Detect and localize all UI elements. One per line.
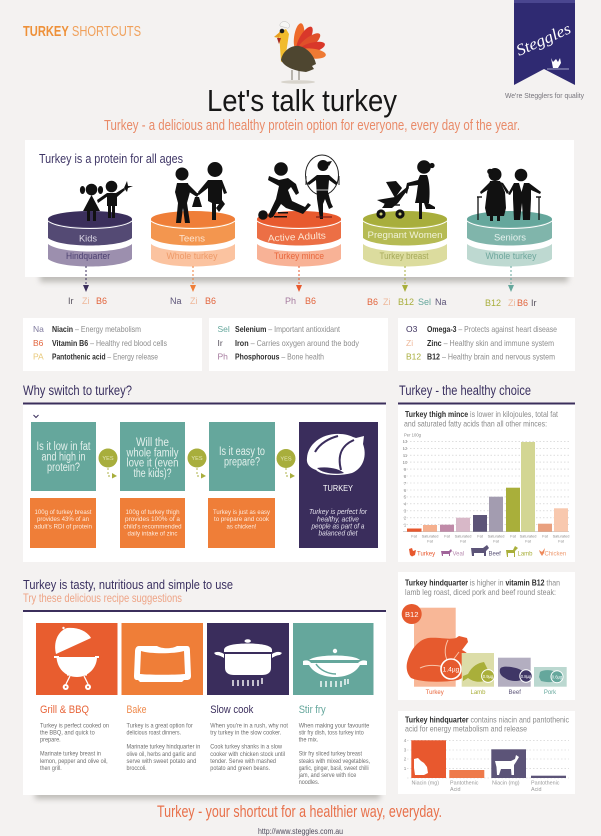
recipe text: stir fry: When making your favourite	[299, 722, 370, 729]
panel: nutrient key centre: Iron – Carries oxygen around the body	[235, 339, 360, 348]
icon: skipping woman silhouette	[306, 155, 339, 219]
B12 intro text	[405, 578, 560, 597]
recipe: stir fry	[293, 623, 374, 695]
heading: healthy choice: Turkey - the healthy choice	[399, 383, 531, 398]
bar: pork: Pork	[544, 690, 557, 696]
bar: pork: 0.6µg	[552, 674, 563, 680]
yes badge and arrow 2	[188, 448, 206, 478]
panel: nutrient key left: PA	[33, 352, 44, 362]
bar chart: fat and saturated fat: 1	[404, 522, 407, 528]
bar: lamb: Lamb	[470, 690, 486, 696]
bar chart: niacin and pantothenic acid: 2	[404, 756, 407, 762]
recipe text: slow cook	[210, 704, 288, 772]
recipe text: stir fry: jam, and serve with rice	[298, 772, 357, 779]
bar: lamb	[462, 653, 494, 696]
recipe: bake	[122, 623, 203, 695]
recipe text: slow cook: Cook turkey shanks in a slow	[210, 744, 282, 751]
closing tagline: Turkey - your shortcut for a healthier way, everyday.	[157, 803, 442, 821]
panel: niacin and pantothenic acid	[398, 711, 575, 794]
nutrient codes under age groups: B12	[485, 298, 501, 308]
niacin intro text	[405, 716, 569, 734]
question box 1: protein?	[47, 462, 80, 474]
recipe text: stir fry: Stir fry	[299, 704, 326, 716]
panel: nutrient key right: Omega-3 – Protects against heart disease	[427, 325, 557, 334]
bar chart: niacin and pantothenic acid: Niacin (mg)	[492, 780, 520, 786]
bar chart: fat and saturated fat: Saturated	[553, 534, 569, 538]
nutrient codes under age groups: Zi	[190, 296, 198, 306]
answer box 2	[120, 498, 185, 548]
label: Teens: Teens	[179, 232, 205, 244]
recipe text: slow cook: cooker with chicken stock until	[210, 751, 285, 758]
nutrient codes under age groups: Zi	[82, 296, 90, 306]
bar chart: fat and saturated fat: 6	[404, 488, 407, 493]
bar: beef: Beef	[509, 690, 521, 696]
panel: nutrient key left: Vitamin B6 – Healthy red blood cells	[52, 339, 167, 348]
bar chart: fat and saturated fat: 3	[404, 508, 407, 514]
bar chart: fat and saturated fat: Per 100g	[404, 432, 422, 438]
recipe text: slow cook: potato and green beans.	[210, 765, 270, 772]
question box 2	[120, 422, 185, 491]
chart intro text: Turkey thigh mince is lower in kilojoules, total fat	[405, 410, 559, 419]
group: pregnant women	[363, 160, 447, 292]
label: Active Adults: Active Adults	[268, 229, 326, 244]
recipe text: bake: delicious roast dinners.	[126, 730, 181, 737]
answer box 2: provides 100% of a	[125, 516, 180, 523]
label: Whole turkey: Whole turkey	[486, 251, 537, 261]
heading: why switch: Why switch to turkey?	[23, 383, 132, 398]
recipe text: grill and bbq: Grill & BBQ	[40, 704, 89, 716]
bar chart: niacin and pantothenic acid: 1	[404, 766, 407, 771]
recipe text: bake: Marinate turkey hindquarter in	[126, 744, 201, 751]
recipe text: grill and bbq: prepare.	[40, 737, 61, 744]
label: Pregnant Women: Pregnant Women	[368, 229, 442, 240]
icon: rooster	[551, 58, 561, 68]
question box 1: Is it low in fat	[36, 441, 91, 453]
turkey conclusion box: Turkey is perfect for	[309, 509, 368, 516]
logo wordmark: Steggles	[514, 21, 574, 60]
bar chart: fat and saturated fat: Saturated	[455, 534, 471, 538]
recipe text: bake: Turkey is a great option for	[126, 722, 193, 729]
answer box 2: 100g of turkey thigh	[126, 509, 180, 516]
chart legend	[409, 545, 566, 558]
recipe text: bake: broccoli.	[126, 765, 147, 772]
answer box 2: child's recommended	[124, 524, 182, 530]
panel: nutrient key right: Zinc – Healthy skin and immune system	[427, 339, 554, 348]
icon: teens silhouette	[175, 162, 227, 223]
bar chart: fat and saturated fat: 11	[403, 453, 408, 458]
recipe text: bake: olive oil, herbs and garlic and	[126, 751, 196, 758]
question box 1: and high in	[42, 452, 86, 464]
group: seniors	[467, 168, 552, 292]
bar chart: fat and saturated fat: Saturated	[520, 534, 536, 538]
nutrient codes under age groups: Zi	[508, 298, 516, 308]
bar chart: niacin and pantothenic acid: Niacin (mg)	[412, 780, 439, 786]
recipe text: bake: serve with sweet potato and	[126, 758, 197, 765]
panel: nutrient key right: B12	[406, 352, 421, 362]
icon: kids silhouette	[80, 181, 133, 221]
recipe text: stir fry: noodles.	[299, 779, 319, 786]
nutrient codes under age groups: B6	[305, 296, 316, 306]
icon: baking dish	[134, 646, 191, 682]
bar chart: fat and saturated fat: 13	[403, 439, 408, 444]
turkey conclusion box: healthy, active	[317, 516, 359, 524]
bar chart: fat and saturated fat: Fat	[411, 534, 418, 538]
answer box 1	[30, 498, 96, 548]
question box 3: Is it easy to	[219, 446, 265, 458]
question box 3	[209, 422, 275, 491]
answer box 3: as chicken!	[226, 524, 257, 530]
nutrient codes under age groups: Ir	[68, 296, 74, 306]
panel: nutrient key right: B12 – Healthy brain and nervous system	[427, 352, 555, 362]
recipe text: stir fry: steaks with mixed vegetables,	[299, 758, 370, 765]
chart legend: Beef	[488, 552, 501, 558]
turkey conclusion box	[299, 422, 378, 548]
title: Let's talk turkey	[207, 83, 397, 118]
niacin intro text: Turkey hindquarter contains niacin and pantothenic	[405, 716, 569, 724]
turkey conclusion box: balanced diet	[318, 530, 358, 538]
recipe text: slow cook: When you're in a rush, why not	[210, 722, 288, 729]
question box 1	[31, 422, 96, 491]
bar chart: fat and saturated fat: Fat	[542, 534, 549, 538]
recipe text: grill and bbq: the BBQ, and quick to	[40, 730, 95, 737]
bar chart: fat and saturated fat: Fat	[558, 538, 565, 544]
chart legend: Chicken	[544, 552, 566, 558]
nutrient codes under age groups: Zi	[383, 297, 390, 307]
answer box 3	[208, 498, 275, 548]
nutrient codes under age groups: Sel	[418, 297, 431, 307]
question box 3: prepare?	[224, 456, 260, 468]
bar chart: fat and saturated fat: 9	[404, 467, 407, 472]
recipe text: grill and bbq: lemon, pepper and olive oil,	[40, 758, 108, 765]
badge: B12	[402, 604, 422, 624]
panel: nutrient key left: B6	[33, 338, 44, 348]
question box 2: whole family	[126, 448, 179, 460]
nutrient codes under age groups: Ph	[285, 296, 296, 306]
panel: why switch flow	[23, 402, 386, 562]
panel: nutrient key centre: Phosphorous – Bone health	[235, 352, 324, 362]
recipe text: slow cook: Slow cook	[210, 704, 254, 716]
recipe text: slow cook: try turkey in the slow cooker.	[210, 730, 281, 737]
bar chart: fat and saturated fat: Fat	[477, 534, 484, 538]
answer box 1: 100g of turkey breast	[34, 509, 92, 516]
panel: nutrient key centre: Ir	[218, 338, 223, 348]
chart intro text: and saturated fatty acids than all other minces:	[404, 420, 547, 428]
panel: nutrient key left	[23, 318, 202, 371]
bar chart: niacin and pantothenic acid: 4	[404, 738, 407, 743]
panel: nutrient key left: Pantothenic acid – Energy release	[52, 352, 158, 362]
panel: vitamin B12 comparison	[398, 572, 575, 700]
turkey conclusion box: people as part of a	[311, 524, 365, 530]
recipe text: grill and bbq: Turkey is perfect cooked on	[40, 722, 109, 729]
bar chart: fat and saturated fat: Fat	[493, 538, 500, 544]
bar chart: fat and saturated fat: Fat	[525, 538, 532, 544]
nutrient codes under age groups: B6	[205, 296, 216, 306]
nutrient codes under age groups: B6	[517, 298, 528, 308]
panel: nutrient key right: Zi	[406, 338, 413, 348]
bar chart: fat and saturated fat: Saturated	[422, 534, 438, 538]
label: Seniors: Seniors	[494, 232, 526, 242]
bar chart: niacin and pantothenic acid: Acid	[531, 787, 542, 793]
yes badge and arrow 3	[276, 449, 296, 478]
panel: nutrient key left: Niacin – Energy metabolism	[52, 325, 141, 334]
label: Hindquarter: Hindquarter	[66, 251, 110, 261]
icon: cow	[495, 755, 519, 775]
brand wordmark: Turkey Shortcuts: TURKEY SHORTCUTS	[23, 23, 141, 40]
group: kids	[48, 181, 133, 292]
yes badge and arrow 3: YES	[280, 456, 292, 462]
recipe text: grill and bbq: then grill.	[40, 765, 62, 772]
logo tagline: We're Stegglers for quality	[505, 93, 584, 100]
question box 2: love it (even	[126, 458, 178, 470]
yes badge and arrow 2: YES	[191, 456, 203, 462]
bar: turkey: 1.4µg	[443, 666, 460, 674]
bar chart: niacin and pantothenic acid: Pantothenic	[450, 780, 479, 786]
bar chart: fat and saturated fat: 12	[403, 446, 408, 451]
nutrient codes under age groups: B6	[367, 297, 378, 307]
answer box 1: provides 43% of an	[37, 516, 89, 523]
recipe text: stir fry: the mix.	[299, 737, 318, 744]
label: Whole turkey: Whole turkey	[166, 251, 218, 261]
yes badge and arrow 1: YES	[102, 456, 114, 462]
answer box 3: Turkey is just as easy	[213, 509, 271, 516]
recipe text: grill and bbq	[40, 704, 109, 772]
recipe text: bake	[126, 704, 201, 772]
niacin intro text: acid for energy metabolism and release	[405, 724, 527, 734]
answer box 3: to prepare and cook	[214, 516, 270, 523]
bar: beef	[498, 658, 532, 696]
bar chart: niacin and pantothenic acid: Acid	[450, 787, 460, 793]
panel: nutrient key centre	[209, 318, 388, 371]
yes badge and arrow 1	[98, 448, 118, 478]
bar: turkey: Turkey	[426, 690, 444, 696]
icon: roast turkey	[307, 434, 365, 475]
bar: turkey	[407, 608, 470, 696]
group: teens	[151, 162, 235, 292]
recipe text: slow cook: tender. Serve with mashed	[210, 758, 276, 765]
label: Turkey breast: Turkey breast	[380, 251, 429, 261]
recipe text: stir fry: Stir fry sliced turkey breast	[299, 751, 362, 758]
panel: recipes	[23, 610, 386, 799]
icon: footballer silhouette	[258, 162, 311, 220]
nutrient codes under age groups: B12	[398, 297, 414, 307]
icon: seniors silhouette	[477, 168, 541, 221]
panel: mince comparison chart	[398, 402, 575, 562]
recipe text: stir fry	[298, 704, 370, 786]
label: Turkey mince: Turkey mince	[274, 251, 324, 261]
bar chart: fat and saturated fat: Saturated	[488, 534, 504, 538]
recipe text: stir fry: stir fry dish, toss turkey into	[299, 730, 364, 737]
answer box 2: daily intake of zinc	[128, 530, 178, 538]
bar chart: fat and saturated fat: Fat	[460, 538, 467, 544]
panel: nutrient key left: Na	[33, 324, 44, 334]
bar chart: fat and saturated fat: 8	[404, 474, 407, 479]
icon: pregnant woman silhouette	[405, 160, 435, 219]
nutrient codes under age groups: B6	[96, 296, 107, 306]
question box 2: Will the	[136, 437, 169, 449]
turkey conclusion box: TURKEY	[323, 484, 353, 493]
B12 intro text: Turkey hindquarter is higher in vitamin B12 than	[405, 578, 560, 588]
arrow	[296, 266, 302, 292]
panel: nutrient key right	[398, 318, 575, 371]
chart intro text	[404, 410, 559, 428]
nutrient codes under age groups: Na	[170, 296, 182, 306]
bar chart: niacin and pantothenic acid	[404, 738, 569, 793]
arrow	[190, 266, 196, 292]
bar: beef: 0.8µg	[521, 674, 532, 679]
bar chart: fat and saturated fat: Fat	[427, 538, 434, 544]
nutrient codes under age groups: Ir	[531, 298, 537, 308]
icon: stroller	[376, 181, 409, 219]
bar chart: niacin and pantothenic acid: 3	[404, 748, 407, 752]
source url: http://www.steggles.com.au	[258, 827, 343, 836]
chart legend: Turkey	[417, 552, 435, 558]
heading: tasty nutritious simple: Turkey is tasty, nutritious and simple to use	[23, 578, 233, 592]
icon: kettle grill	[54, 627, 99, 690]
question box 2: the kids)?	[134, 468, 172, 480]
icon: stock pot	[214, 639, 282, 686]
bar chart: fat and saturated fat: Fat	[444, 534, 451, 538]
panel heading: Turkey is a protein for all ages	[39, 152, 183, 166]
recipe: grill and bbq	[36, 623, 118, 695]
logo: Steggles banner	[514, 0, 575, 85]
panel: nutrient key centre: Selenium – Important antioxidant	[235, 325, 341, 334]
badge: B12: B12	[405, 610, 418, 619]
nutrient codes under age groups	[68, 296, 537, 308]
bar: pork	[534, 667, 567, 696]
chart legend: Lamb	[518, 552, 533, 558]
icon: cartoon turkey	[274, 22, 326, 84]
arrow	[83, 266, 89, 292]
bar chart: niacin and pantothenic acid: Pantothenic	[531, 780, 560, 786]
recipe: slow cook	[207, 623, 289, 695]
recipe text: grill and bbq: Marinate turkey breast in	[40, 751, 101, 758]
panel: protein for all ages	[25, 140, 574, 292]
B12 intro text: lamb leg roast, diced pork and beef round steak:	[405, 588, 556, 597]
nutrient codes under age groups: Na	[435, 297, 447, 307]
bar chart: fat and saturated fat: 5	[404, 494, 407, 500]
group: active adults	[257, 155, 341, 292]
panel: nutrient key centre: Ph	[218, 352, 228, 362]
arrow	[508, 266, 514, 292]
bar chart: fat and saturated fat: 7	[404, 481, 407, 486]
bar: lamb: 0.9µg	[483, 674, 494, 679]
label: Kids: Kids	[79, 232, 97, 244]
chart legend: Veal	[452, 552, 464, 558]
arrow	[402, 266, 408, 292]
answer box 1: adult's RDI of protein	[34, 524, 92, 530]
recipe text: bake: Bake	[126, 704, 146, 716]
bar chart: fat and saturated fat: 10	[403, 460, 408, 465]
recipe text: stir fry: garlic, ginger, basil, sweet chilli	[299, 765, 369, 772]
icon: turkey cut	[414, 758, 428, 775]
bar chart: fat and saturated fat	[403, 432, 569, 544]
bar chart: fat and saturated fat: 2	[404, 516, 407, 520]
subheading: recipe suggestions: Try these delicious recipe suggestions	[23, 591, 182, 605]
panel: nutrient key centre: Sel	[218, 324, 230, 334]
icon: wok	[303, 649, 367, 687]
bar chart: fat and saturated fat: 4	[404, 502, 407, 506]
panel: nutrient key right: O3	[406, 324, 418, 334]
bar chart: fat and saturated fat: Fat	[510, 534, 517, 538]
